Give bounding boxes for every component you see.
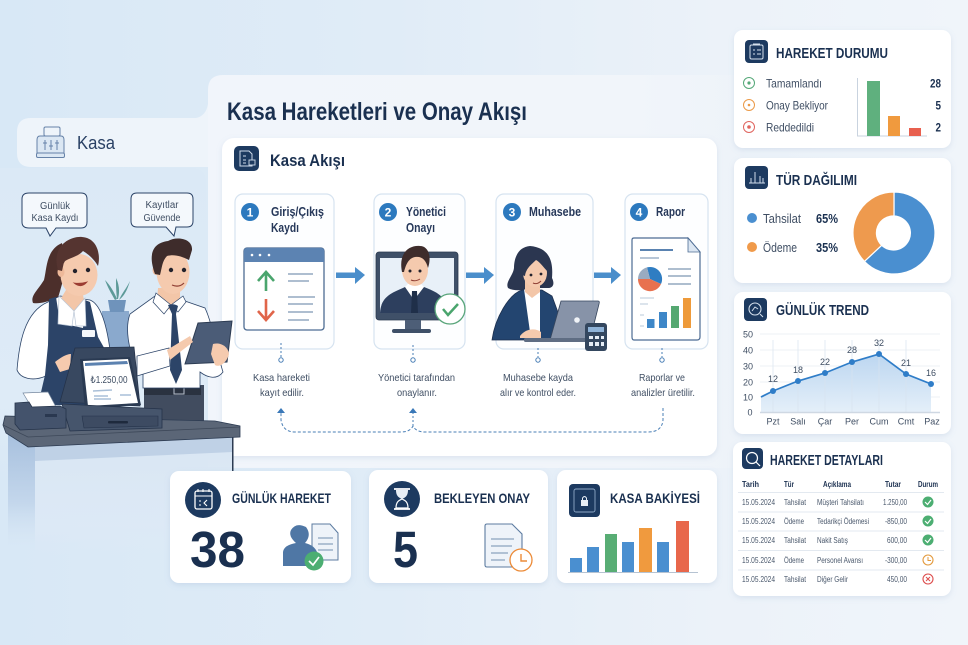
table: movements: 450,00 — [887, 575, 907, 584]
panel: Hareket Detayları — [733, 442, 951, 596]
panel: Kasa Akışı — [222, 138, 717, 456]
table: movements: 15.05.2024 — [742, 575, 775, 584]
line chart: daily trend: 0 — [747, 408, 753, 418]
table: movements: Tahsilat — [784, 498, 807, 507]
step 3: Muhasebe — [492, 194, 607, 351]
panel: Kasa Bakiyesi — [557, 470, 717, 583]
table: movements: -850,00 — [885, 517, 907, 526]
table: movements: 15.05.2024 — [742, 536, 775, 545]
caption: step 4: Raporlar ve — [639, 372, 685, 384]
line chart: daily trend: 18 — [793, 365, 803, 375]
line chart: daily trend: 16 — [926, 368, 936, 378]
caption: step 1 — [253, 372, 310, 399]
bar chart: status — [857, 78, 927, 136]
line chart: daily trend: 20 — [743, 378, 753, 388]
line chart: daily trend: 50 — [743, 330, 753, 340]
icon: clipboard — [745, 40, 768, 63]
step 2: Yönetici Onayı: 2 — [385, 206, 392, 220]
step 3: Muhasebe: Muhasebe — [529, 204, 581, 219]
label: GÜNLÜK HAREKET: GÜNLÜK HAREKET — [232, 490, 331, 506]
speech bubble: Kayıtlar Güvende — [131, 193, 193, 236]
table: movements: Müşteri Tahsilatı — [817, 498, 864, 507]
arrow: step 1 to 2 — [336, 267, 365, 284]
step 1: Giriş/Çıkış Kaydı: Giriş/Çıkış — [271, 204, 324, 219]
table: movements: -300,00 — [885, 556, 907, 565]
step 2: Yönetici Onayı: Yönetici — [406, 204, 446, 219]
panel: Tür Dağılımı — [734, 158, 951, 283]
step 4: Rapor: Rapor — [656, 204, 685, 219]
status legend: Reddedildi — [766, 120, 814, 134]
icon: cash register — [36, 127, 64, 158]
table: movements: Tür — [784, 480, 794, 489]
caption: step 4 — [631, 372, 695, 399]
icon: calendar — [185, 482, 221, 518]
legend: Tahsilat: 65% — [816, 211, 838, 226]
legend: Tahsilat — [747, 211, 838, 226]
status counts — [930, 76, 941, 134]
line chart: daily trend: 22 — [820, 357, 830, 367]
speech bubble: Kayıtlar Güvende: Güvende — [144, 213, 181, 224]
icon: person with document — [283, 524, 338, 570]
icon: document with clock — [485, 524, 532, 571]
heading: HAREKET DETAYLARI: HAREKET DETAYLARI — [770, 452, 883, 469]
caption: step 3: alır ve kontrol eder. — [500, 387, 576, 399]
illustration: cashiers at the counter — [3, 193, 240, 555]
title: Kasa Hareketleri ve Onay Akışı — [227, 98, 527, 126]
line chart: daily trend: 12 — [768, 374, 778, 384]
icon: magnifier — [742, 448, 763, 469]
panel: title backdrop — [208, 75, 740, 468]
heading: TÜR DAĞILIMI: TÜR DAĞILIMI — [776, 171, 857, 189]
speech bubble: Günlük Kasa Kaydı: Kasa Kaydı — [32, 213, 78, 224]
line chart: daily trend: 21 — [901, 358, 911, 368]
table: movements: Açıklama — [823, 480, 851, 489]
table: movements: Nakit Satış — [817, 536, 848, 545]
value: 5: 5 — [393, 521, 418, 578]
caption: step 2: onaylanır. — [397, 387, 437, 399]
line chart: daily trend: Per — [845, 416, 859, 426]
arrow: step 3 to 4 — [594, 267, 621, 284]
line chart: daily trend: 40 — [743, 346, 753, 356]
step 2: Yönetici Onayı: Onayı — [406, 220, 435, 235]
caption: step 3: Muhasebe kayda — [503, 372, 573, 384]
caption: step 3 — [500, 372, 576, 399]
icon: manager on monitor — [376, 246, 465, 333]
speech bubble: Günlük Kasa Kaydı: Günlük — [40, 201, 71, 212]
label: Kasa: Kasa — [77, 133, 116, 153]
step 4: Rapor — [625, 194, 708, 349]
line chart: daily trend: Cmt — [898, 416, 915, 426]
illustration: accountant with laptop — [492, 246, 607, 351]
icon: safe — [569, 484, 600, 517]
icon: report document — [632, 238, 700, 340]
line chart: daily trend — [743, 330, 940, 426]
status counts: 2 — [936, 120, 941, 134]
man with tablet — [128, 238, 232, 425]
connector: step captions and return path — [277, 343, 664, 432]
donut chart — [853, 192, 935, 274]
value: 38: 38 — [190, 521, 245, 578]
table: movements: Durum — [918, 480, 938, 489]
line chart: daily trend: 28 — [847, 345, 857, 355]
receipt printer — [15, 392, 66, 430]
caption: step 2 — [378, 372, 455, 399]
step 1: Giriş/Çıkış Kaydı: 1 — [247, 206, 254, 220]
table: movements: 15.05.2024 — [742, 556, 775, 565]
label: KASA BAKİYESİ: KASA BAKİYESİ — [610, 490, 700, 506]
table: movements: Tahsilat — [784, 575, 807, 584]
step 1: Giriş/Çıkış Kaydı: Kaydı — [271, 220, 299, 235]
icon: flow document — [234, 146, 259, 171]
table: movements: Diğer Gelir — [817, 575, 848, 584]
status legend: Onay Bekliyor — [766, 98, 828, 112]
caption: step 1: kayıt edilir. — [260, 387, 304, 399]
caption: step 4: analizler üretilir. — [631, 387, 695, 399]
legend: Ödeme: 35% — [816, 240, 838, 255]
line chart: daily trend: Çar — [818, 416, 832, 426]
icon: hourglass — [384, 481, 420, 517]
panel: Bekleyen Onay — [369, 470, 548, 583]
panel: Günlük Trend — [734, 292, 951, 434]
status counts: 5 — [936, 98, 941, 112]
plant on stand — [102, 278, 130, 347]
step 1: Giriş/Çıkış Kaydı — [235, 194, 334, 349]
step 4: Rapor: 4 — [636, 206, 643, 220]
icon: bars — [745, 166, 768, 189]
table: movements: 1.250,00 — [883, 498, 907, 507]
line chart: daily trend: 10 — [743, 392, 753, 402]
arrow: step 2 to 3 — [466, 267, 494, 284]
line chart: daily trend: 32 — [874, 338, 884, 348]
line chart: daily trend: Cum — [869, 416, 889, 426]
bar chart: balance — [568, 521, 698, 572]
step 3: Muhasebe: 3 — [509, 206, 516, 220]
label: BEKLEYEN ONAY: BEKLEYEN ONAY — [434, 490, 531, 506]
panel: Günlük Hareket — [170, 471, 351, 583]
line chart: daily trend: Paz — [924, 416, 940, 426]
table: movements: Ödeme — [784, 556, 804, 565]
counter — [3, 416, 240, 555]
panel: cashier backdrop — [0, 168, 206, 480]
table: movements: Personel Avansı — [817, 556, 863, 565]
heading: HAREKET DURUMU: HAREKET DURUMU — [776, 45, 888, 62]
status legend — [744, 76, 828, 134]
table: movements: 600,00 — [887, 536, 907, 545]
table: movements: Tedarikçi Ödemesi — [817, 517, 869, 526]
line chart: daily trend: Pzt — [766, 416, 780, 426]
speech bubble: Günlük Kasa Kaydı — [22, 193, 87, 236]
status counts: 28 — [930, 76, 941, 90]
table: movements: 15.05.2024 — [742, 498, 775, 507]
legend: Tahsilat: Tahsilat — [763, 211, 801, 226]
table: movements: Tahsilat — [784, 536, 807, 545]
step 2: Yönetici Onayı — [374, 194, 465, 349]
table: movements: 15.05.2024 — [742, 517, 775, 526]
heading: Kasa Akışı: Kasa Akışı — [270, 151, 345, 170]
caption: step 2: Yönetici tarafından — [378, 372, 455, 384]
panel: Hareket Durumu — [734, 30, 951, 148]
status legend: Tamamlandı — [766, 76, 822, 90]
table: movements: Tarih — [742, 480, 759, 489]
speech bubble: Kayıtlar Güvende: Kayıtlar — [146, 200, 179, 211]
heading: GÜNLÜK TREND: GÜNLÜK TREND — [776, 302, 869, 319]
cash register with display — [60, 347, 162, 431]
line chart: daily trend: 30 — [743, 362, 753, 372]
panel: Kasa tab — [17, 104, 208, 167]
line chart: daily trend: Salı — [790, 416, 806, 426]
icon: trend search — [744, 298, 767, 321]
icon: entry window — [244, 248, 324, 330]
legend: Ödeme: Ödeme — [763, 240, 797, 255]
woman cashier — [17, 237, 110, 405]
table: movements: Tutar — [885, 480, 901, 489]
legend: Ödeme — [747, 240, 838, 255]
cash register with display: ₺1.250,00 — [90, 375, 128, 386]
caption: step 1: Kasa hareketi — [253, 372, 310, 384]
table: movements — [738, 480, 944, 584]
table: movements: Ödeme — [784, 517, 804, 526]
